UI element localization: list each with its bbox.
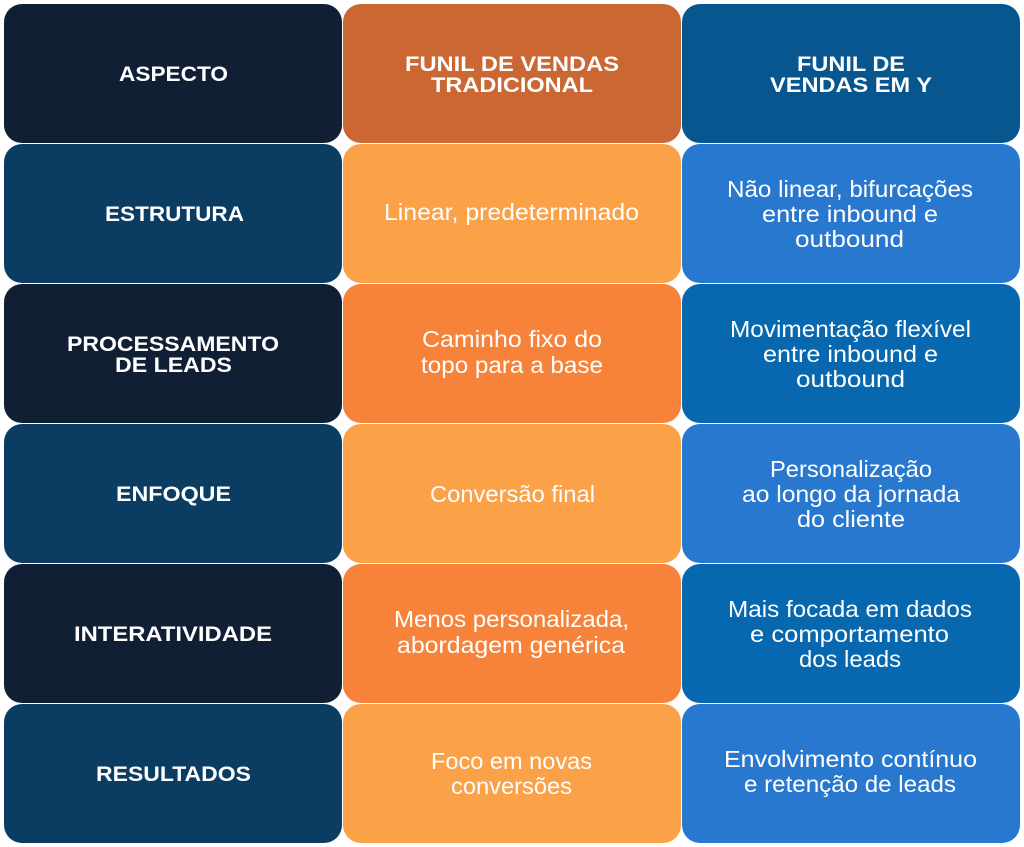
cell: processamento em Y xyxy=(682,284,1020,423)
cell: interatividade em Y xyxy=(682,564,1020,703)
cell: resultados tradicional: conversões xyxy=(451,773,572,799)
row: processamento de leads xyxy=(4,284,1020,423)
label: resultados: RESULTADOS xyxy=(96,762,251,786)
cell: enfoque em Y: do cliente xyxy=(797,506,905,532)
header: aspecto xyxy=(4,4,342,143)
header: funil de vendas em Y: FUNIL DE xyxy=(797,52,905,76)
cell: enfoque tradicional: Conversão final xyxy=(430,481,595,507)
cell: resultados em Y: Envolvimento contínuo xyxy=(724,746,977,772)
cell: estrutura em Y: outbound xyxy=(795,226,904,252)
label: estrutura xyxy=(4,144,342,283)
cell: resultados tradicional xyxy=(343,704,681,843)
header: funil de vendas em Y: VENDAS EM Y xyxy=(770,73,932,97)
cell: estrutura em Y: entre inbound e xyxy=(762,201,938,227)
label: resultados xyxy=(4,704,342,843)
cell: interatividade em Y: dos leads xyxy=(799,646,901,672)
cell: interatividade tradicional: Menos personalizada, xyxy=(394,606,629,632)
header: aspecto: ASPECTO xyxy=(119,62,228,86)
row: interatividade xyxy=(4,564,1020,703)
header row xyxy=(4,4,1020,143)
header: funil de vendas tradicional xyxy=(343,4,681,143)
cell: processamento em Y: entre inbound e xyxy=(763,341,938,367)
cell: resultados em Y xyxy=(682,704,1020,843)
cell: processamento em Y: Movimentação flexível xyxy=(730,316,971,342)
cell: processamento tradicional xyxy=(343,284,681,423)
label: enfoque: ENFOQUE xyxy=(116,482,231,506)
label: enfoque xyxy=(4,424,342,563)
cell: interatividade em Y: e comportamento xyxy=(750,621,949,647)
cell: resultados tradicional: Foco em novas xyxy=(431,748,592,774)
header: funil de vendas tradicional: TRADICIONAL xyxy=(431,73,593,97)
cell: estrutura em Y xyxy=(682,144,1020,283)
row: resultados xyxy=(4,704,1020,843)
cell: enfoque tradicional xyxy=(343,424,681,563)
label: processamento de leads: PROCESSAMENTO xyxy=(67,332,279,356)
label: interatividade: INTERATIVIDADE xyxy=(74,622,272,646)
label: estrutura: ESTRUTURA xyxy=(105,202,244,226)
cell: processamento tradicional: topo para a base xyxy=(421,352,603,378)
cell: enfoque em Y: Personalização xyxy=(770,456,932,482)
cell: processamento tradicional: Caminho fixo do xyxy=(422,326,602,352)
cell: estrutura tradicional xyxy=(343,144,681,283)
cell: interatividade em Y: Mais focada em dados xyxy=(728,596,972,622)
label: processamento de leads: DE LEADS xyxy=(115,353,232,377)
cell: estrutura em Y: Não linear, bifurcações xyxy=(727,176,973,202)
cell: resultados em Y: e retenção de leads xyxy=(744,771,956,797)
cell: estrutura tradicional: Linear, predeterminado xyxy=(384,199,639,225)
header: funil de vendas tradicional: FUNIL DE VENDAS xyxy=(405,52,619,76)
row: enfoque xyxy=(4,424,1020,563)
label: processamento de leads xyxy=(4,284,342,423)
cell: interatividade tradicional xyxy=(343,564,681,703)
cell: interatividade tradicional: abordagem genérica xyxy=(397,632,625,658)
cell: enfoque em Y: ao longo da jornada xyxy=(742,481,960,507)
label: interatividade xyxy=(4,564,342,703)
header: funil de vendas em Y xyxy=(682,4,1020,143)
cell: processamento em Y: outbound xyxy=(796,366,905,392)
cell: enfoque em Y xyxy=(682,424,1020,563)
row: estrutura xyxy=(4,144,1020,283)
